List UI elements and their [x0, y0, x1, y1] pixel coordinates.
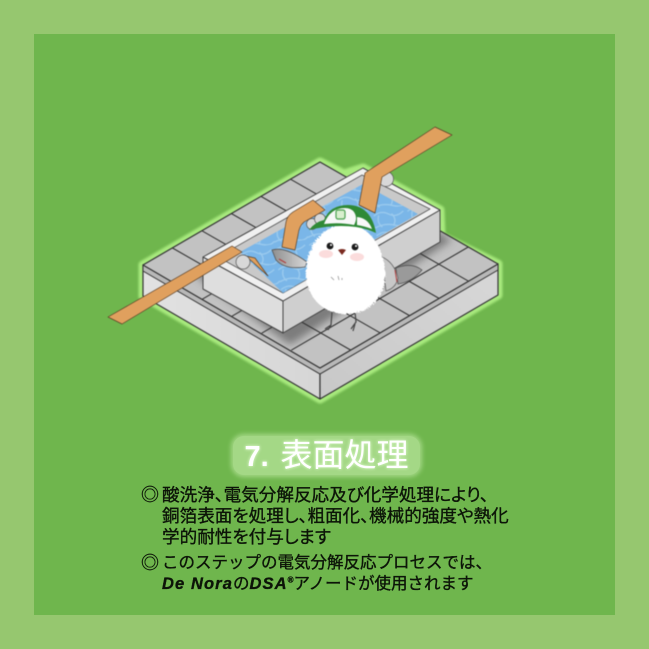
fluffy body [306, 224, 385, 314]
bullet 1 line 1: 酸洗浄、電気分解反応及び化学処理により、 [162, 485, 489, 505]
support cylinders [306, 218, 318, 230]
bullet 1 mark: ◎ [141, 485, 159, 505]
basin inner wall [218, 175, 430, 293]
platform left wall [143, 265, 320, 399]
support cylinder [378, 172, 394, 186]
basin rim [203, 168, 440, 301]
bullet 2 line 2: De NoraのDSA®アノードが使用されます [162, 575, 474, 593]
right pipe [359, 127, 452, 213]
bullet 1 line 3: 学的耐性を付与します [162, 527, 331, 547]
white side panel [357, 217, 372, 229]
face [319, 243, 364, 280]
right wing [382, 257, 422, 291]
treatment basin [203, 168, 440, 333]
left wing [272, 249, 307, 268]
bullet 1 line 2: 銅箔表面を処理し、粗面化、機械的強度や熱化 [162, 506, 509, 526]
white crown [324, 208, 356, 225]
legs [325, 312, 356, 331]
orange wedge in water [246, 256, 268, 276]
platform [143, 162, 498, 399]
tail feather [396, 265, 422, 284]
orange strip with bend [359, 127, 452, 213]
basin right wall [283, 210, 440, 333]
bullet 2 line 1: このステップの電気分解反応プロセスでは、 [162, 554, 492, 572]
bird mascot [272, 205, 422, 331]
green brim and band [309, 205, 376, 233]
middle pipe [282, 200, 326, 250]
logo [336, 210, 345, 219]
support cylinder [236, 255, 250, 269]
bullet 2 mark: ◎ [141, 553, 159, 573]
illustration: electrolytic surface treatment bath with bird mascot [107, 126, 504, 404]
platform lip [143, 264, 498, 374]
cap [309, 205, 376, 233]
orange bend [282, 200, 325, 250]
platform right wall [320, 264, 498, 399]
tiled top surface [143, 162, 498, 368]
basin left wall [203, 257, 283, 333]
glow outline [143, 162, 498, 399]
left pipe [108, 246, 268, 324]
water [240, 184, 418, 293]
title: 7. 表面処理 [244, 437, 409, 473]
orange strip [108, 246, 242, 324]
title pill background [233, 436, 420, 475]
